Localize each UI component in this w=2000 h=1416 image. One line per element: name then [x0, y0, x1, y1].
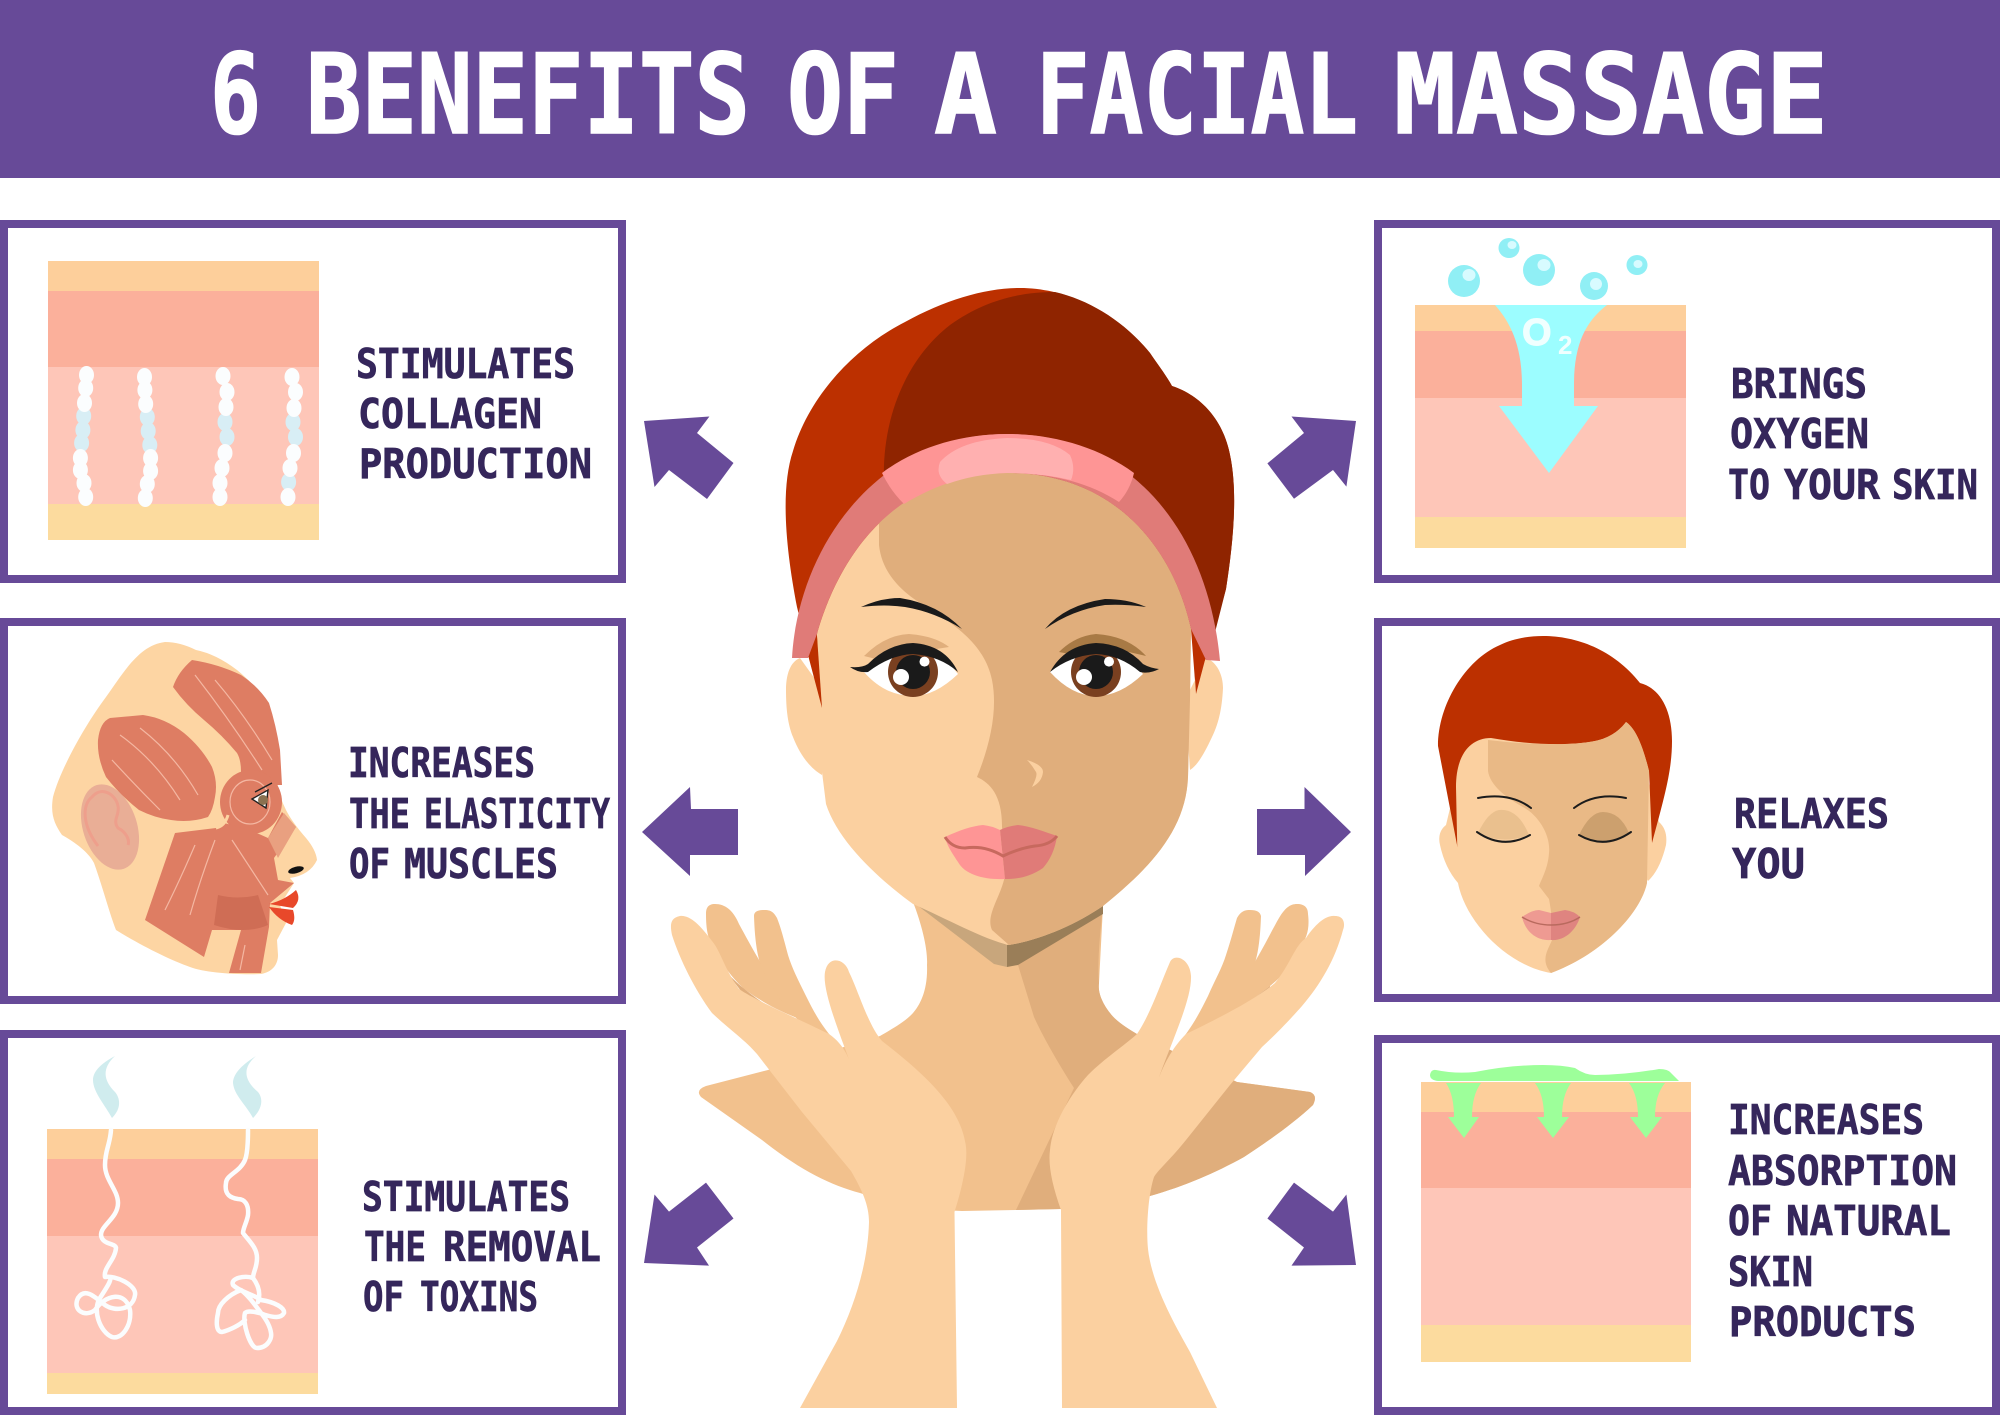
arrow: to top left panel [644, 416, 734, 499]
palm and arm [1049, 916, 1344, 1408]
panel text: INCREASES [348, 739, 535, 787]
left hand [671, 904, 966, 1408]
central woman figure [699, 288, 1315, 1211]
right hand [1049, 904, 1344, 1408]
arrow: to top right panel [1267, 416, 1356, 499]
title text: MASSAGE [1394, 31, 1828, 160]
title text: A [934, 31, 997, 160]
panel: brings oxygen to your skin [1378, 224, 1996, 579]
panel text: TOXINS [420, 1273, 538, 1321]
skin layers with oxygen arrow [1415, 238, 1686, 548]
panel text: STIMULATES [356, 340, 575, 388]
eyelids [1478, 810, 1529, 840]
panel: increases absorption of natural skin products [1378, 1039, 1996, 1411]
temporal muscle [98, 715, 216, 821]
ear [71, 777, 149, 877]
lips [945, 825, 1057, 879]
panel text: ELASTICITY [424, 790, 610, 838]
oxygen label: O [1522, 312, 1552, 354]
panel text: ABSORPTION [1728, 1147, 1957, 1195]
panel text: NATURAL [1786, 1197, 1951, 1245]
hair [786, 288, 1234, 708]
panel text: TO [1728, 461, 1770, 509]
palm shadow [725, 970, 858, 1083]
nose [1027, 760, 1043, 787]
skin layers with absorbed product [1421, 1065, 1691, 1362]
title text: OF [787, 31, 899, 160]
panel text: RELAXES [1734, 790, 1889, 838]
arrow: to middle left panel [642, 787, 738, 876]
panel: relaxes you [1378, 622, 1996, 998]
panel text: REMOVAL [443, 1223, 601, 1271]
palm and arm [671, 916, 966, 1408]
title text [210, 31, 1828, 160]
title text: 6 [210, 31, 261, 160]
arrow: to bottom right panel [1267, 1183, 1356, 1266]
panel text: PRODUCTION [359, 440, 592, 488]
lips [1522, 910, 1551, 940]
panel text: THE [349, 790, 410, 838]
panel text [362, 1173, 601, 1321]
skin layers with oxygen arrow: 2 [1558, 330, 1572, 360]
icon: facial muscle profile [52, 642, 317, 974]
panel text: COLLAGEN [358, 390, 542, 438]
face [817, 473, 1191, 945]
lower face muscles [145, 812, 296, 973]
nostril [287, 865, 305, 875]
title text: FACIAL [1036, 31, 1358, 160]
panel: stimulates removal of toxins [4, 1034, 622, 1411]
panel text: OF [349, 840, 390, 888]
panel: stimulates collagen production [4, 224, 622, 579]
left eye [850, 634, 958, 697]
toxin threads [76, 1130, 284, 1348]
neck and shoulders [699, 902, 1315, 1211]
panel text: THE [364, 1223, 426, 1271]
panel text [1728, 1096, 1957, 1346]
arrow: to bottom left panel [644, 1183, 734, 1266]
panel text: STIMULATES [362, 1173, 570, 1221]
oxygen bubbles [1448, 238, 1648, 300]
lips [269, 890, 298, 925]
back fingers [1186, 904, 1309, 1034]
panel text: OXYGEN [1730, 410, 1869, 458]
panel text: SKIN [1728, 1248, 1813, 1296]
panel text: SKIN [1892, 461, 1978, 509]
panel text: INCREASES [1728, 1096, 1924, 1144]
muscle fibres [112, 675, 272, 970]
panel text [1732, 790, 1889, 888]
title text: BENEFITS [306, 31, 750, 160]
panel text: YOU [1732, 840, 1805, 888]
panel text: MUSCLES [404, 840, 558, 888]
eye [252, 783, 272, 808]
frontal muscle [173, 660, 282, 785]
vapor wisps [93, 1056, 261, 1118]
panel: increases elasticity of muscles [4, 622, 622, 1000]
panel text: YOUR [1784, 461, 1880, 509]
hair wedges by ears [808, 629, 1205, 708]
skin layers with toxin threads [47, 1056, 318, 1394]
panel text [348, 739, 610, 888]
panel text: PRODUCTS [1729, 1298, 1916, 1346]
ears [786, 658, 1223, 775]
arrow: to middle right panel [1257, 787, 1351, 876]
skin layers with collagen chains [48, 261, 319, 540]
panel text [1728, 360, 1978, 509]
oxygen arrow [1495, 305, 1607, 473]
panel text [356, 340, 592, 488]
right eye [1050, 634, 1159, 697]
eyebrows [861, 598, 1146, 629]
orbital muscle [220, 770, 282, 834]
green product layer and arrows [1430, 1065, 1679, 1138]
back fingers [706, 904, 829, 1034]
face shadow [879, 473, 1191, 945]
eyelashes and eyebrows [1477, 796, 1631, 842]
title banner [0, 0, 2000, 178]
headband [792, 434, 1220, 661]
icon: relaxed face [1438, 636, 1672, 973]
panel text: OF [1728, 1197, 1772, 1245]
palm shadow [1157, 986, 1270, 1083]
panel text: BRINGS [1731, 360, 1867, 408]
panel text: OF [363, 1273, 404, 1321]
